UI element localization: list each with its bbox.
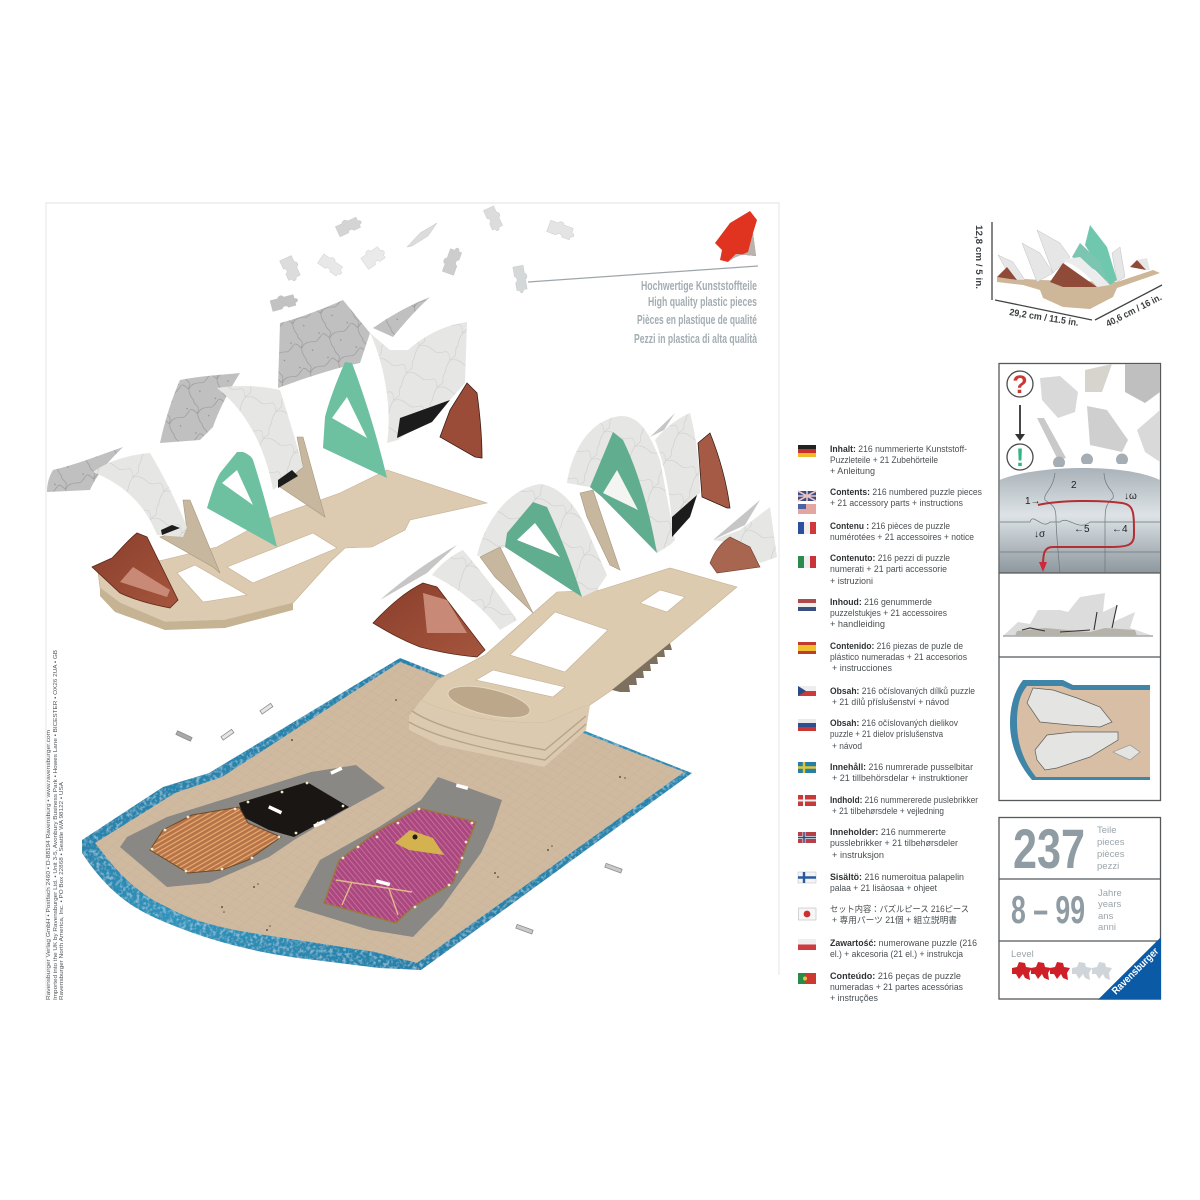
contents: Polish: Zawartość: numerowane puzzle (216 bbox=[830, 938, 977, 948]
exploded model: left section bbox=[47, 297, 487, 630]
dark shell undersides bbox=[161, 400, 450, 535]
flag: Italy bbox=[798, 556, 816, 568]
model base bbox=[997, 270, 1160, 309]
contents: Italian: numerati + 21 parti accessorie bbox=[830, 564, 947, 574]
front shell bbox=[1060, 257, 1110, 287]
contents: English: Contents: 216 numbered puzzle pieces bbox=[830, 487, 983, 497]
green ribs bbox=[505, 432, 657, 597]
contents: Spanish: + instrucciones bbox=[832, 663, 893, 673]
contents: Dutch: + handleiding bbox=[830, 619, 885, 629]
contents: Czech bbox=[830, 686, 975, 707]
section dividers bbox=[999, 573, 1160, 657]
opera theatre cutout bbox=[294, 777, 502, 937]
flag: Germany bbox=[798, 445, 816, 457]
flag: Netherlands bbox=[798, 599, 816, 611]
exclamation circle bbox=[1007, 444, 1033, 472]
assembly order numbers: ↓σ bbox=[1034, 529, 1046, 540]
deck and podium bbox=[421, 568, 737, 723]
plastic pieces text: Hochwertige Kunststoffteile bbox=[641, 279, 757, 293]
piece count: 237 bbox=[1013, 817, 1085, 880]
contents: Danish: + 21 tilbehørsdele + vejledning bbox=[832, 806, 944, 816]
contents: Slovak: puzzle + 21 dielov príslušenstva bbox=[830, 729, 943, 739]
age range: 8 – 99 bbox=[1011, 889, 1085, 932]
contents: Norwegian bbox=[830, 827, 958, 860]
contents: Slovak bbox=[830, 718, 959, 751]
piece count: pièces bbox=[1097, 849, 1125, 860]
legal address text bbox=[46, 650, 65, 1000]
contents: Dutch bbox=[830, 597, 948, 629]
green shell interiors bbox=[1072, 225, 1117, 285]
grey wisps bbox=[380, 413, 760, 600]
contents: French bbox=[830, 521, 974, 542]
flag: Denmark bbox=[798, 795, 816, 806]
contents: Spanish: Contenido: 216 piezas de puzle de bbox=[830, 641, 963, 651]
legal address text: Ravensburger North America, Inc. • PO Box 22868 • Seattle WA 98122 • USA bbox=[59, 782, 65, 1000]
brown shells bbox=[92, 533, 178, 608]
loose clips bbox=[176, 703, 622, 934]
contents: Spanish bbox=[830, 641, 968, 673]
contents: Swedish: + 21 tillbehörsdelar + instruktioner bbox=[832, 773, 968, 783]
contents: Spanish: plástico numeradas + 21 accesorios bbox=[830, 652, 968, 662]
flag: Spain bbox=[798, 642, 816, 654]
assembly order numbers: 2 bbox=[1071, 480, 1077, 491]
contents: Finnish: palaa + 21 lisäosaa + ohjeet bbox=[830, 883, 938, 893]
assembly order numbers: ←5 bbox=[1074, 524, 1090, 535]
plastic pieces text bbox=[634, 279, 757, 346]
contents: Italian: Contenuto: 216 pezzi di puzzle bbox=[830, 553, 950, 563]
brown interiors bbox=[997, 260, 1147, 287]
contents: Dutch: puzzelstukjes + 21 accessoires bbox=[830, 608, 948, 618]
contents text in 15 languages bbox=[830, 444, 983, 1003]
flag: Sweden bbox=[798, 762, 816, 773]
podium layers bbox=[409, 711, 586, 760]
dimension lines bbox=[992, 222, 1162, 320]
Ravensburger logo corner bbox=[1098, 937, 1161, 1000]
contents: Portuguese: Conteúdo: 216 peças de puzzle bbox=[830, 971, 961, 981]
green ribs bbox=[207, 362, 387, 547]
contents: Danish: Indhold: 216 nummererede puslebrikker bbox=[830, 795, 978, 805]
plastic pieces text: Pièces en plastique de qualité bbox=[637, 313, 757, 327]
contents: German: Puzzleteile + 21 Zubehörteile bbox=[830, 455, 938, 465]
podium oval bbox=[445, 680, 533, 724]
contents: Portuguese bbox=[830, 971, 964, 1003]
contents: French: numérotées + 21 accessoires + notice bbox=[830, 532, 974, 542]
plastic pieces text: Pezzi in plastica di alta qualità bbox=[634, 332, 757, 346]
depth label: 40,6 cm / 16 in. bbox=[1104, 292, 1164, 330]
brace behind rib bbox=[580, 490, 620, 570]
plastic pieces text: High quality plastic pieces bbox=[648, 295, 757, 309]
dark shell undersides bbox=[672, 495, 697, 537]
arrow bbox=[1015, 405, 1025, 441]
brown shells bbox=[373, 583, 485, 657]
flags column bbox=[798, 445, 816, 984]
assembly order numbers bbox=[1025, 480, 1137, 540]
scattered puzzle pieces bbox=[269, 205, 577, 312]
flag: Czechia bbox=[798, 686, 816, 696]
base plate with water and auditoriums bbox=[82, 658, 692, 970]
difficulty level bbox=[1011, 949, 1112, 980]
exploded model: right section bbox=[373, 413, 777, 767]
contents: French: Contenu : 216 pièces de puzzle bbox=[830, 521, 950, 531]
instructions panel bbox=[999, 364, 1160, 800]
contents: Portuguese: numeradas + 21 partes acessórias bbox=[830, 982, 964, 992]
contents: Japanese bbox=[830, 903, 969, 925]
contents: Italian: + istruzioni bbox=[830, 576, 873, 586]
deck teeth bbox=[612, 643, 672, 692]
braces bbox=[160, 437, 325, 573]
model shells bbox=[998, 230, 1125, 282]
section: side elevation model bbox=[1003, 593, 1153, 636]
contents: Norwegian: + instruksjon bbox=[832, 850, 884, 860]
section: top view model bbox=[1010, 680, 1150, 780]
contents: Finnish: Sisältö: 216 numeroitua palapelin bbox=[830, 872, 964, 882]
legal address text: Ravensburger Verlag GmbH • Postfach 2460 • D-88194 Ravensburg • www.ravensburger.com bbox=[46, 730, 52, 1000]
deck bbox=[98, 470, 487, 622]
piece count: Teile bbox=[1097, 825, 1117, 836]
contents: Japanese: セット内容：パズルピース 216ピース bbox=[830, 903, 969, 914]
white shells bbox=[432, 413, 777, 630]
contents: English: + 21 accessory parts + instructions bbox=[830, 498, 964, 508]
assembled puzzle surface bbox=[1000, 468, 1160, 573]
width label: 29,2 cm / 11.5 in. bbox=[1009, 307, 1079, 329]
red assembly path bbox=[1038, 501, 1134, 572]
flag: France bbox=[798, 522, 816, 534]
finished model with dimensions bbox=[973, 222, 1164, 330]
flag: Portugal bbox=[798, 973, 816, 984]
contents: Dutch: Inhoud: 216 genummerde bbox=[830, 597, 932, 607]
legal address text: Imported into the UK by Ravensburger Ltd. • Unit 3-5, Avonbury Business Park • Howes Lane • BICESTER • OX26 2UA • GB bbox=[53, 650, 59, 1000]
piece count: pezzi bbox=[1097, 861, 1119, 872]
Ravensburger logo corner: Ravensburger bbox=[1110, 946, 1161, 997]
question mark circle: ? bbox=[1012, 371, 1028, 399]
flag: Japan bbox=[798, 908, 816, 920]
age range: ans bbox=[1098, 911, 1114, 922]
concert hall cutout bbox=[120, 765, 385, 887]
contents: Swedish bbox=[830, 762, 973, 783]
contents: Japanese: + 専用パーツ 21個 + 組立説明書 bbox=[832, 914, 957, 925]
contents: German: Inhalt: 216 nummerierte Kunststoff- bbox=[830, 444, 967, 454]
illustration frame bbox=[46, 203, 779, 1000]
grey shell sheets bbox=[47, 297, 430, 492]
contents: Slovak: + návod bbox=[832, 741, 862, 751]
flag: Finland bbox=[798, 872, 816, 883]
contents: Polish bbox=[830, 938, 977, 959]
braces bbox=[480, 547, 533, 613]
callout: plastic pieces bbox=[528, 211, 758, 346]
panel outline bbox=[999, 364, 1160, 800]
contents: Slovak: Obsah: 216 očíslovaných dielikov bbox=[830, 718, 959, 728]
deck specks bbox=[221, 699, 626, 931]
age range: anni bbox=[1098, 922, 1116, 933]
age range: years bbox=[1098, 899, 1121, 910]
assembly order numbers: ↓ω bbox=[1124, 491, 1137, 502]
loose pieces bbox=[1037, 364, 1160, 462]
product info panel bbox=[999, 817, 1161, 1000]
water edge bbox=[82, 658, 692, 970]
contents: German bbox=[830, 444, 967, 476]
contents: Norwegian: pusslebrikker + 21 tilbehørsdeler bbox=[830, 838, 958, 848]
assembly order numbers: ←4 bbox=[1112, 524, 1128, 535]
height label: 12,8 cm / 5 in. bbox=[973, 225, 984, 289]
leader line bbox=[528, 266, 758, 282]
small white shell bbox=[1137, 258, 1150, 270]
contents: Czech: Obsah: 216 očíslovaných dílků puzzle bbox=[830, 686, 975, 696]
exclamation circle: ! bbox=[1016, 444, 1024, 472]
contents: Czech: + 21 dílů příslušenství + návod bbox=[832, 697, 949, 707]
flag: Norway bbox=[798, 832, 816, 843]
contents: English bbox=[830, 487, 983, 508]
icon: red Ravensburger piece bbox=[715, 211, 757, 262]
flag: UK and USA bbox=[798, 491, 816, 514]
contents: Danish bbox=[830, 795, 978, 816]
piece count: pieces bbox=[1097, 837, 1125, 848]
contents: Norwegian: Inneholder: 216 nummererte bbox=[830, 827, 946, 837]
podium sides bbox=[409, 700, 590, 767]
contents: Polish: el.) + akcesoria (21 el.) + instrukcja bbox=[830, 949, 963, 959]
contents: Italian bbox=[830, 553, 950, 586]
flag: Slovakia bbox=[798, 719, 816, 731]
contents: Swedish: Innehåll: 216 numrerade pusselbitar bbox=[830, 762, 973, 772]
panel outline bbox=[999, 818, 1160, 999]
contents: Portuguese: + instruções bbox=[830, 993, 879, 1003]
question mark circle bbox=[1007, 371, 1033, 399]
age range: Jahre bbox=[1098, 888, 1122, 899]
flag: Poland bbox=[798, 939, 816, 950]
contents: Finnish bbox=[830, 872, 964, 893]
sand deck bbox=[95, 662, 684, 963]
difficulty level: Level bbox=[1011, 949, 1034, 960]
contents: German: + Anleitung bbox=[830, 466, 875, 476]
assembly order numbers: 1→ bbox=[1025, 496, 1041, 507]
white shells bbox=[93, 322, 467, 537]
piece seams bbox=[1000, 473, 1160, 573]
